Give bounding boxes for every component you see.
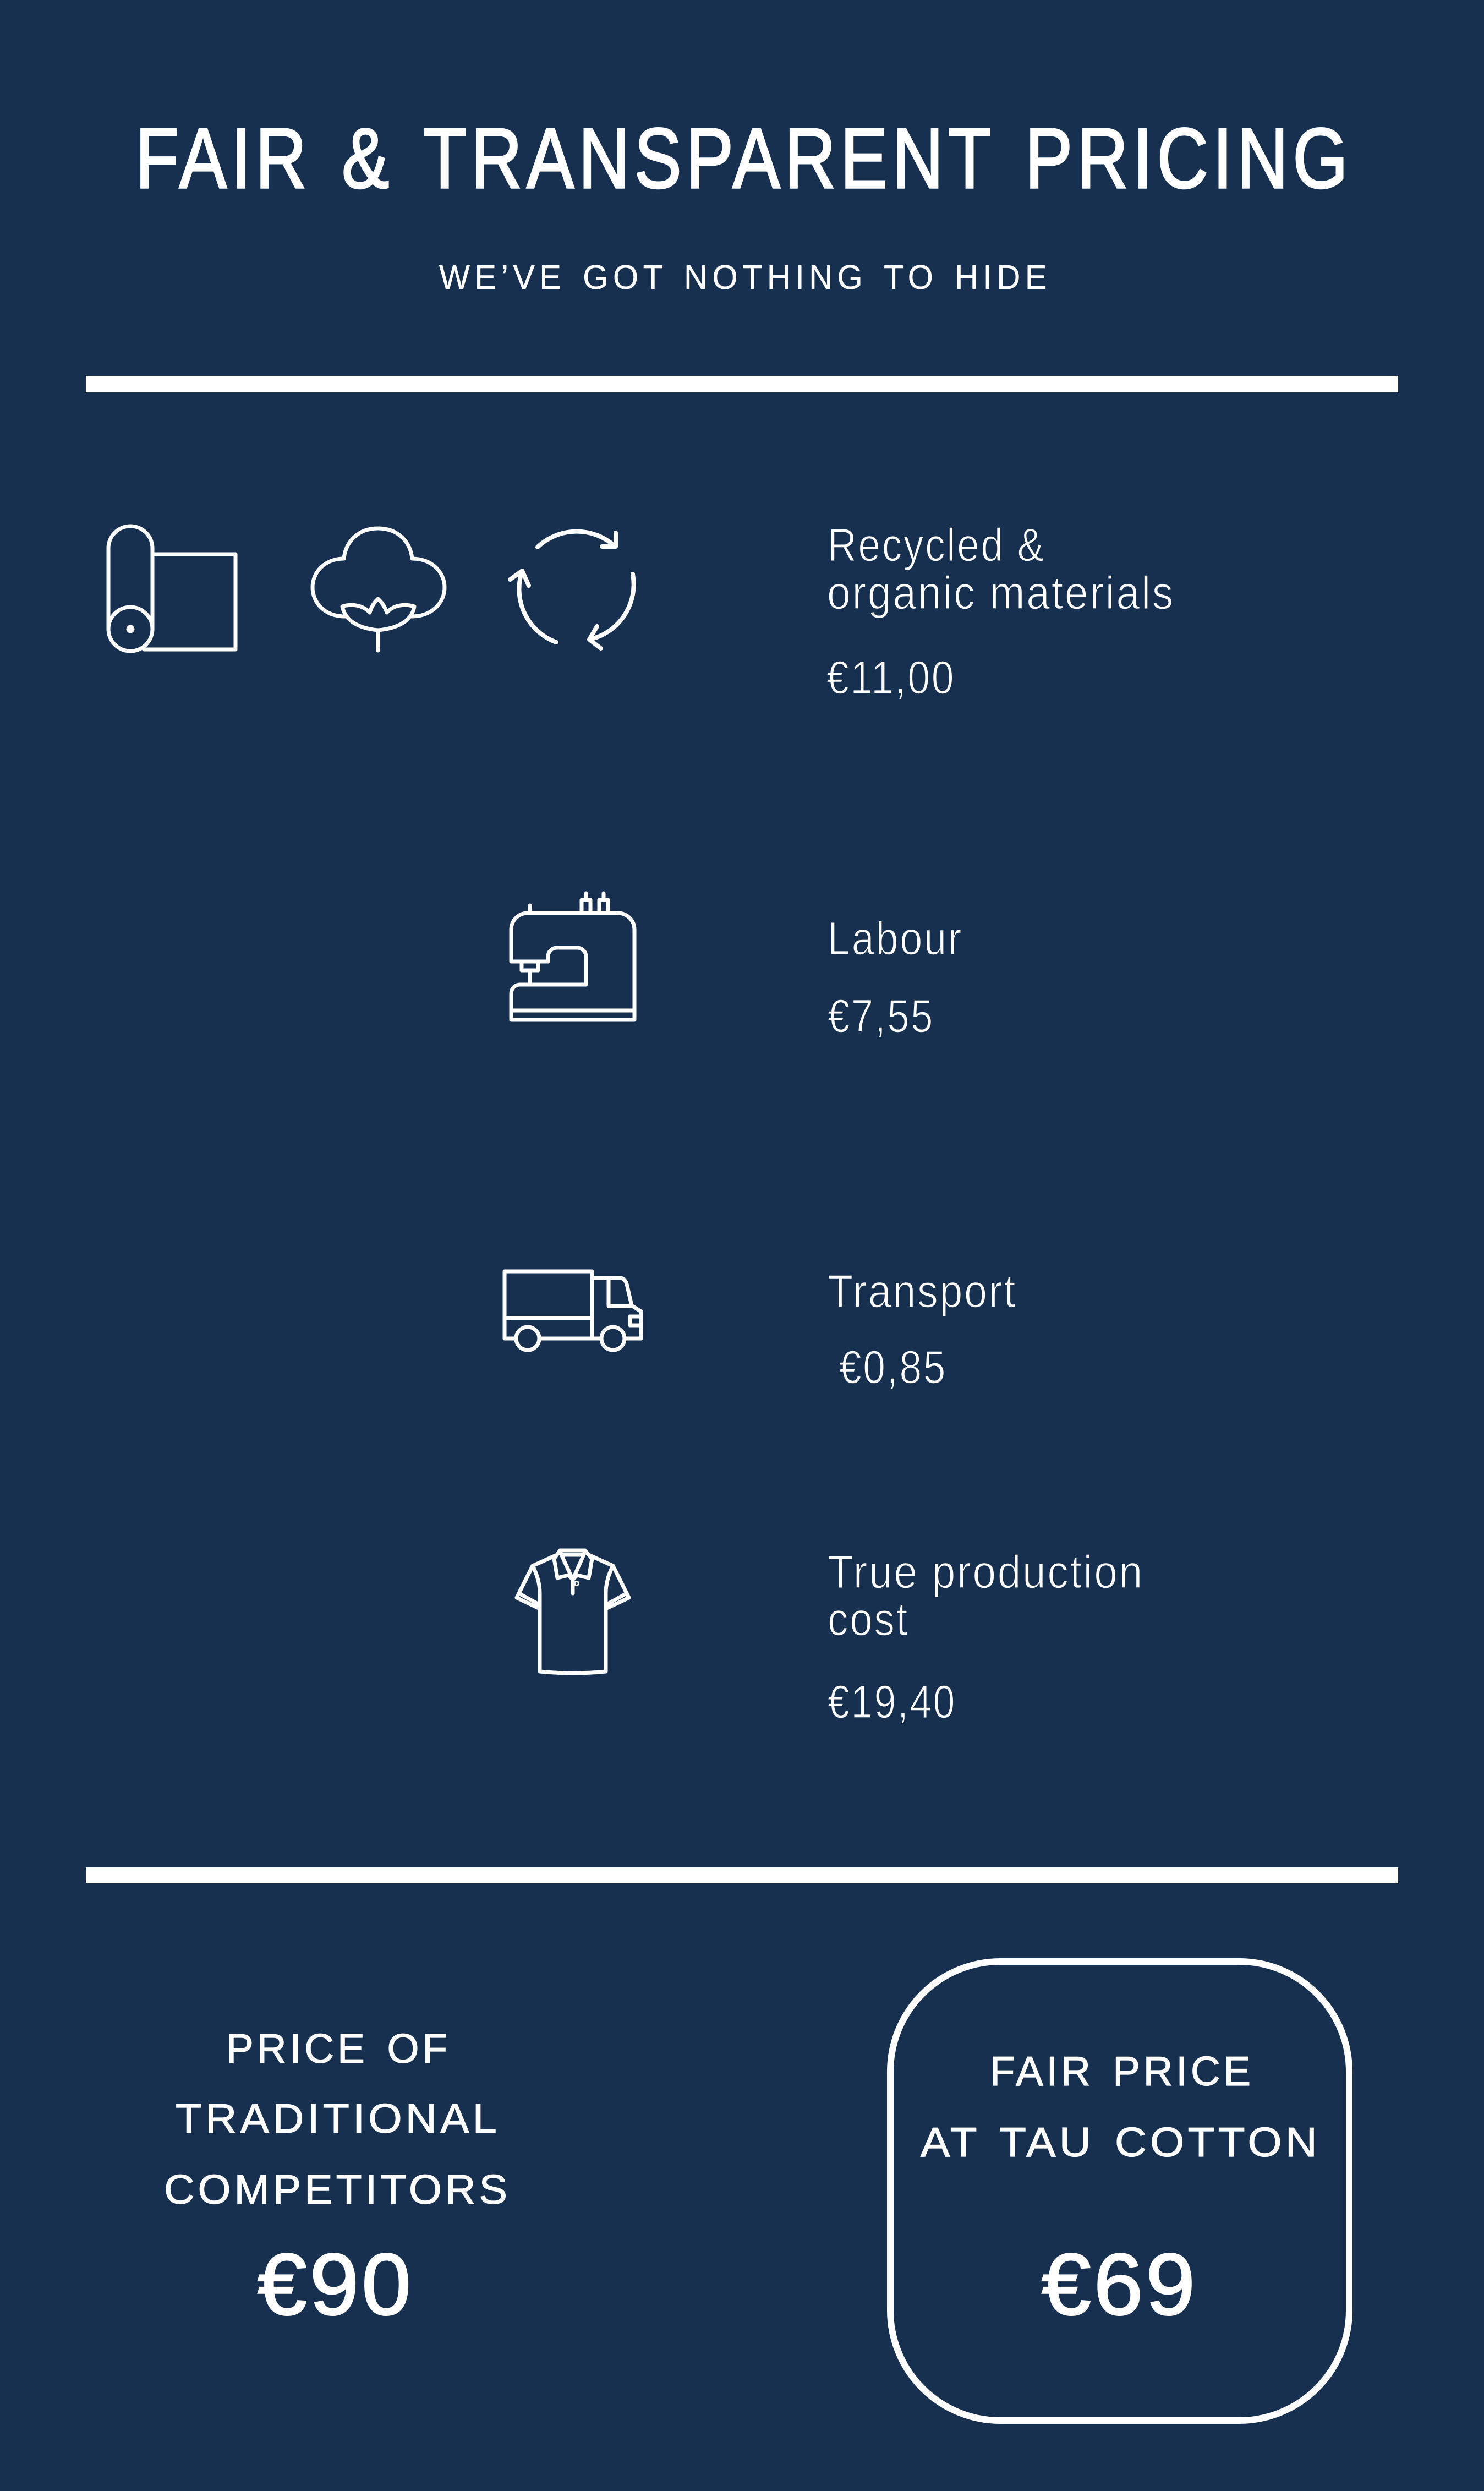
callout: fair price	[890, 1962, 1349, 2421]
panel: labour row	[511, 893, 963, 1042]
value: fair price: €69	[1042, 2236, 1198, 2333]
icon: cotton plant	[313, 528, 445, 651]
label: materials second line: organic materials	[827, 567, 1175, 619]
subtitle: WE’VE GOT NOTHING TO HIDE	[439, 259, 1052, 297]
price: transport: €0,85	[839, 1341, 947, 1393]
icon: fabric roll	[108, 526, 236, 651]
icon: recycle arrows	[510, 532, 634, 648]
icon: truck	[505, 1271, 641, 1350]
price: materials: €11,00	[826, 652, 955, 703]
label: cost second line: cost	[828, 1593, 909, 1645]
panel: true production cost row	[517, 1546, 1144, 1728]
price: true production cost: €19,40	[828, 1676, 956, 1728]
rounded frame	[890, 1962, 1349, 2421]
icon: sewing machine	[511, 893, 634, 1020]
price: labour: €7,55	[828, 990, 934, 1042]
label: materials: Recycled &	[828, 519, 1045, 571]
heading line: fair price: FAIR PRICE	[990, 2048, 1254, 2094]
label: true production cost: True production	[828, 1546, 1144, 1598]
label: transport: Transport	[828, 1265, 1017, 1317]
icon: polo shirt	[517, 1550, 629, 1673]
label: labour: Labour	[828, 913, 963, 964]
heading line: competitors: COMPETITORS	[164, 2166, 511, 2213]
panel: materials row	[108, 519, 1175, 703]
value: competitor price: €90	[258, 2236, 414, 2333]
heading line: price of: PRICE OF	[226, 2025, 451, 2072]
heading line: at tau cotton: AT TAU COTTON	[921, 2119, 1321, 2165]
panel: transport row	[505, 1265, 1017, 1393]
panel: competitor price	[164, 2025, 511, 2333]
heading line: traditional: TRADITIONAL	[176, 2095, 500, 2142]
